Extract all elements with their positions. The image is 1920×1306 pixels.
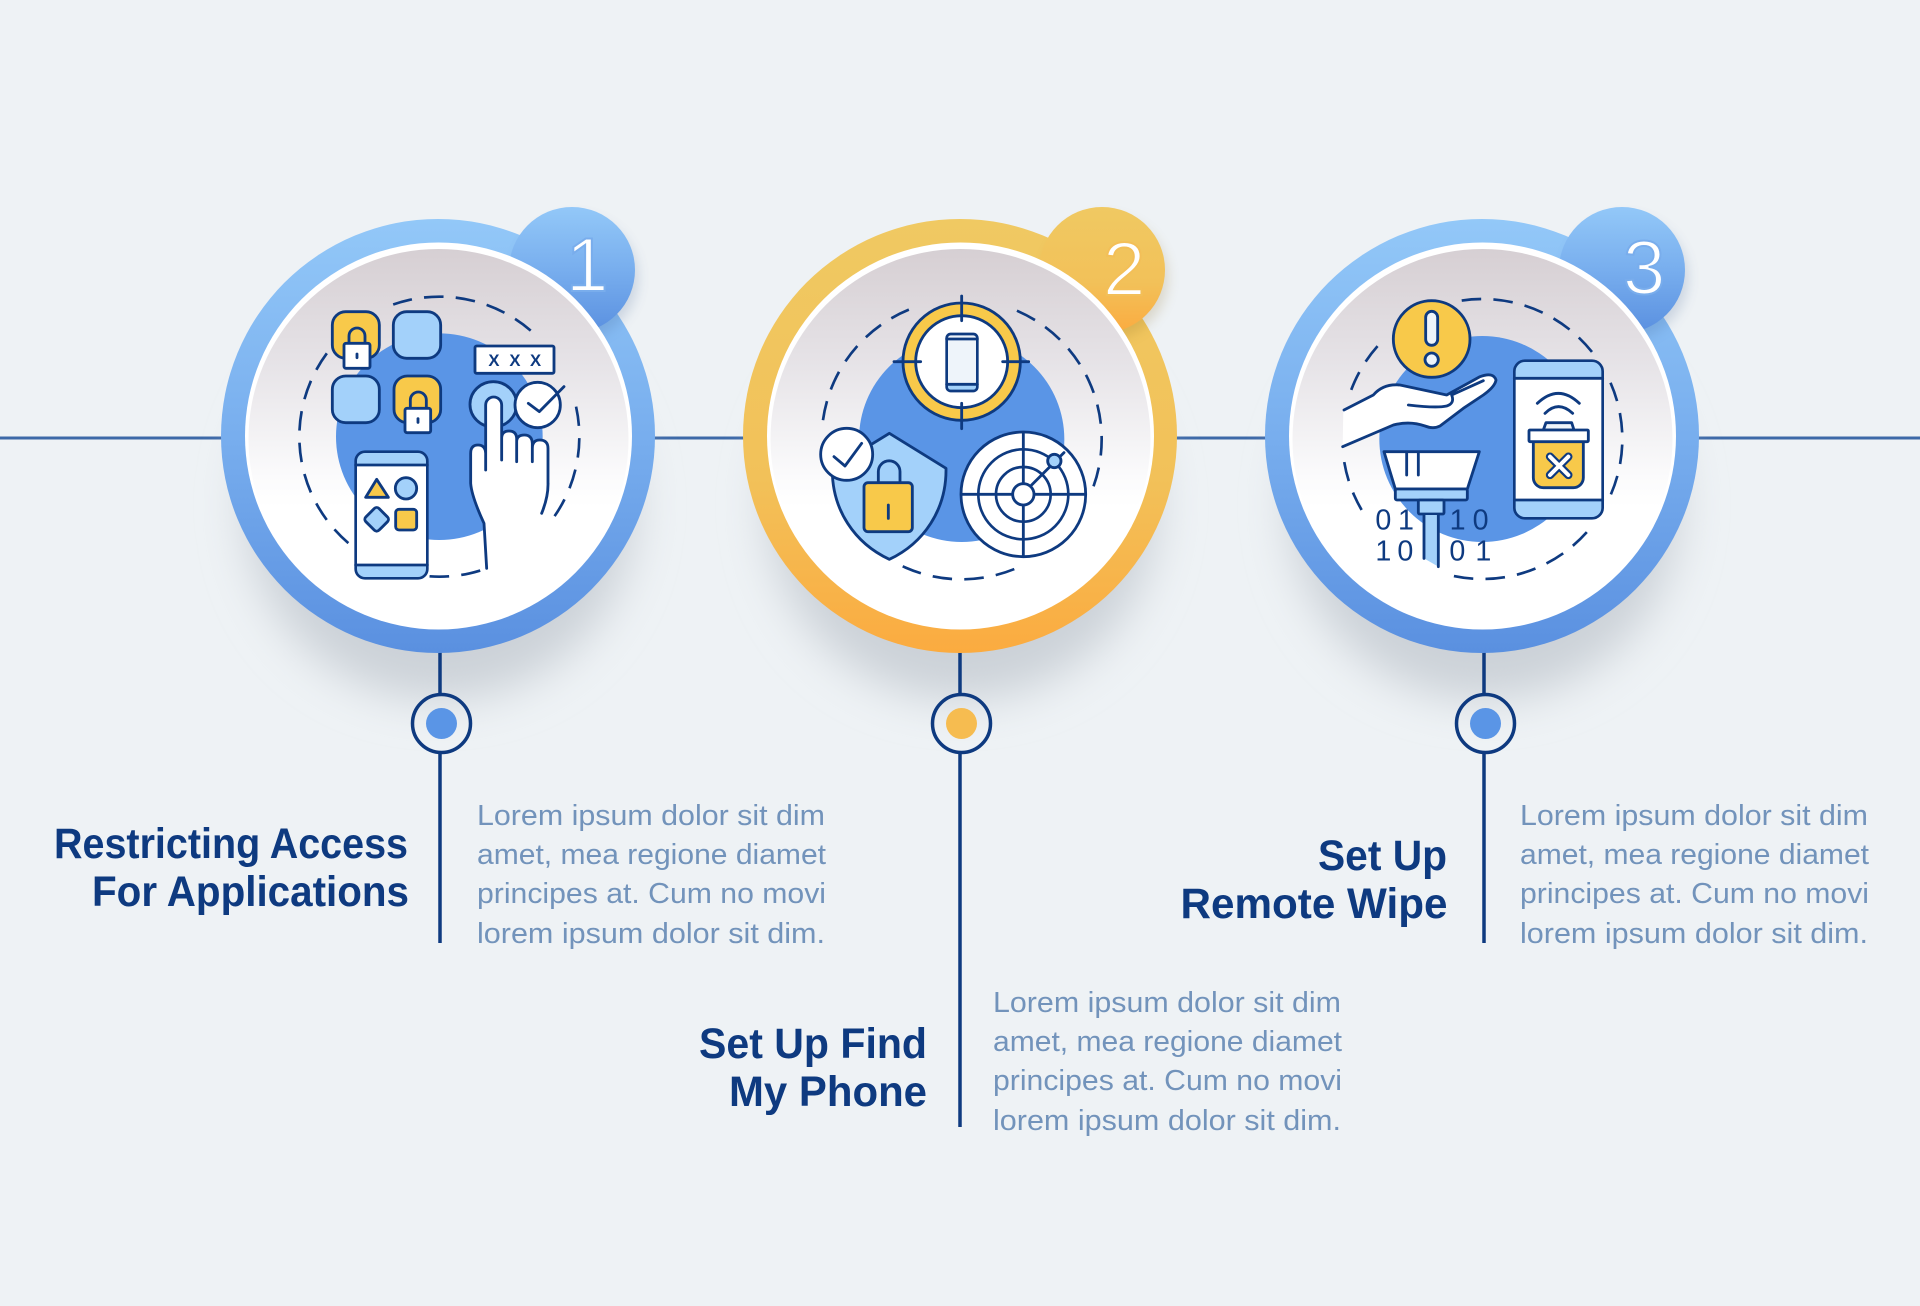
dashed orbit: [273, 270, 606, 603]
icon: app access restriction: [273, 270, 606, 603]
connector stem 1: [438, 650, 442, 943]
body text 1: principes at. Cum no movi: [477, 878, 826, 910]
circle 3 drop shadow: [1289, 310, 1679, 700]
badge shadow 3: [1564, 216, 1688, 340]
heading 1: Restricting Access: [54, 820, 408, 868]
body text 2: lorem ipsum dolor sit dim.: [993, 1105, 1341, 1137]
connector stem 3: [1482, 650, 1486, 943]
touch button: [470, 382, 517, 427]
broom wipe: [1384, 452, 1479, 567]
check badge: [821, 428, 873, 480]
icon: remote wipe: [1298, 255, 1667, 623]
body text 2: Lorem ipsum dolor sit dim: [993, 987, 1341, 1019]
number badge 1: [509, 207, 635, 333]
body text 3: Lorem ipsum dolor sit dim: [1520, 800, 1868, 832]
target with phone: [894, 296, 1029, 429]
body text 1: lorem ipsum dolor sit dim.: [477, 918, 825, 950]
dashed orbit: [777, 255, 1146, 624]
phone with trash bin: [1514, 361, 1603, 518]
badge shadow 1: [514, 216, 638, 340]
gold ring 2: [743, 219, 1177, 653]
binary digits: 1001: [1375, 536, 1491, 568]
timeline node 3: [1456, 694, 1514, 752]
circle 2 drop shadow: [767, 310, 1157, 700]
panel: step 3: [1180, 207, 1869, 950]
horizontal connector line: [0, 436, 1920, 440]
hand: [471, 397, 548, 570]
binary digits: 0110: [1375, 504, 1489, 536]
number badge 2: 2: [1103, 227, 1145, 312]
timeline node 2: [932, 694, 990, 752]
number badge 3: [1559, 207, 1685, 333]
heading 2: My Phone: [729, 1068, 927, 1116]
blue blob: [1379, 336, 1585, 542]
panel: step 1: [54, 207, 826, 950]
dashed orbit: [1298, 255, 1667, 623]
binary digits: [1375, 504, 1491, 568]
number badge 1: 1: [566, 223, 608, 308]
password box: XXX: [488, 351, 541, 370]
inner disc 3: [1289, 242, 1676, 630]
heading 3: Set Up: [1318, 832, 1447, 880]
number badge 3: 3: [1623, 226, 1665, 311]
panel: step 2: [699, 207, 1342, 1137]
inner disc 2: [767, 242, 1154, 630]
number badge 2: [1039, 207, 1165, 333]
password box: [475, 346, 554, 373]
body text 1: amet, mea regione diamet: [477, 839, 826, 871]
icon: find my phone: [777, 255, 1146, 624]
phone with app shapes: [356, 452, 427, 578]
blue blob: [336, 333, 543, 540]
body text 1: Lorem ipsum dolor sit dim: [477, 800, 825, 832]
blue ring 1: [221, 219, 655, 653]
heading 2: Set Up Find: [699, 1020, 927, 1068]
radar: [961, 432, 1086, 557]
blue blob: [859, 337, 1064, 542]
blue ring 3: [1265, 219, 1699, 653]
warning sign: [1393, 301, 1470, 377]
body text 2: amet, mea regione diamet: [993, 1026, 1342, 1058]
body text 3: amet, mea regione diamet: [1520, 839, 1869, 871]
timeline node 1: [412, 694, 470, 752]
body text 2: principes at. Cum no movi: [993, 1065, 1342, 1097]
circle 1 drop shadow: [245, 310, 635, 700]
connector stem 2: [958, 650, 962, 1127]
inner disc 1: [245, 242, 632, 630]
check mark: [515, 382, 564, 428]
heading 1: For Applications: [92, 868, 409, 916]
badge shadow 2: [1044, 216, 1168, 340]
body text 3: lorem ipsum dolor sit dim.: [1520, 918, 1868, 950]
shield with lock: [832, 433, 946, 559]
body text 3: principes at. Cum no movi: [1520, 878, 1869, 910]
heading 3: Remote Wipe: [1180, 880, 1448, 928]
open hand: [1343, 375, 1496, 447]
app tiles with locks: [332, 312, 441, 433]
